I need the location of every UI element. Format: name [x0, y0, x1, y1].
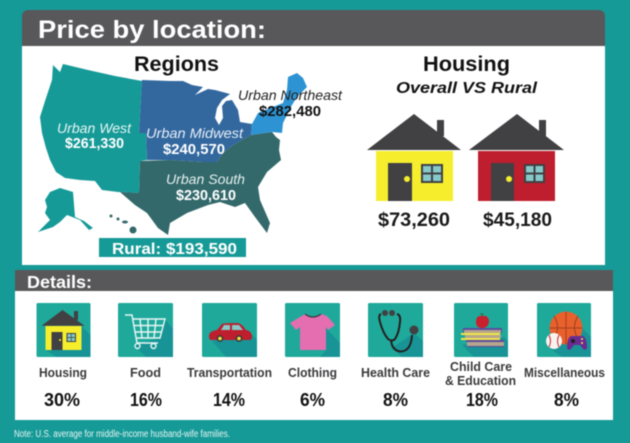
category: health care: Health Care [361, 366, 430, 380]
subheading: overall vs rural: Overall VS Rural [396, 80, 538, 97]
category: miscellaneous [524, 366, 605, 410]
region: west [40, 64, 147, 193]
region: south [120, 132, 281, 235]
label: urban northeast: Urban Northeast [238, 87, 343, 103]
category: child care and education: 18% [466, 390, 498, 410]
map: United States by region [38, 64, 307, 235]
label: urban midwest: $240,570 [163, 141, 225, 158]
heading: price by location: Price by location: [38, 16, 266, 44]
icon: housing category [36, 303, 90, 357]
category: clothing: 6% [300, 390, 325, 410]
category: housing: Housing [39, 366, 87, 380]
category: miscellaneous: Miscellaneous [524, 366, 605, 380]
icon: stethoscope [368, 303, 423, 357]
category: miscellaneous: 8% [554, 390, 579, 410]
category: clothing: Clothing [288, 366, 337, 380]
label: urban northeast [238, 87, 343, 120]
region: midwest [139, 80, 252, 162]
value: overall housing: $73,260 [378, 210, 450, 231]
label: urban south: Urban South [166, 171, 245, 187]
category: transportation [187, 366, 272, 410]
category: child care and education: & Education [445, 374, 516, 388]
category: transportation: 14% [213, 390, 245, 410]
label: urban west: Urban West [57, 120, 132, 136]
label: urban west [57, 120, 132, 152]
category: health care [361, 366, 430, 410]
label: urban south: $230,610 [176, 187, 236, 204]
region: hawaii [110, 214, 136, 234]
category: child care and education: Child Care [450, 360, 512, 374]
category: health care: 8% [383, 390, 408, 410]
footnote: Note: U.S. average for middle-income husband-wife families. [14, 429, 230, 440]
category: transportation: Transportation [187, 366, 272, 380]
label: urban midwest [146, 125, 244, 158]
icon: shopping cart [118, 303, 173, 357]
icon: t-shirt [285, 303, 340, 357]
panel: price by location [22, 10, 605, 265]
icon: rural house [469, 114, 564, 201]
value: rural housing: $45,180 [483, 210, 552, 231]
callout: rural price: Rural: $193,590 [112, 241, 237, 258]
icon: books and apple [454, 303, 508, 357]
category: food: 16% [130, 390, 162, 410]
label: urban midwest: Urban Midwest [146, 125, 244, 141]
heading: housing: Housing [423, 53, 510, 76]
label: urban northeast: $282,480 [259, 103, 321, 120]
category: food [130, 366, 162, 410]
category: clothing [288, 366, 337, 410]
heading: regions: Regions [134, 53, 219, 76]
region: northeast [251, 73, 307, 135]
category: food: Food [130, 366, 161, 380]
region: alaska [38, 188, 93, 232]
callout: rural price [99, 238, 246, 258]
heading: details: Details: [27, 272, 92, 292]
category: housing: 30% [44, 390, 80, 410]
category: child care and education [445, 360, 516, 410]
icon: sports and games [537, 303, 591, 357]
icon: car [202, 303, 257, 357]
panel: details [15, 270, 613, 420]
category: housing [39, 366, 87, 410]
label: urban south [166, 171, 245, 204]
icon: overall house [367, 114, 461, 201]
label: urban west: $261,330 [65, 135, 124, 152]
